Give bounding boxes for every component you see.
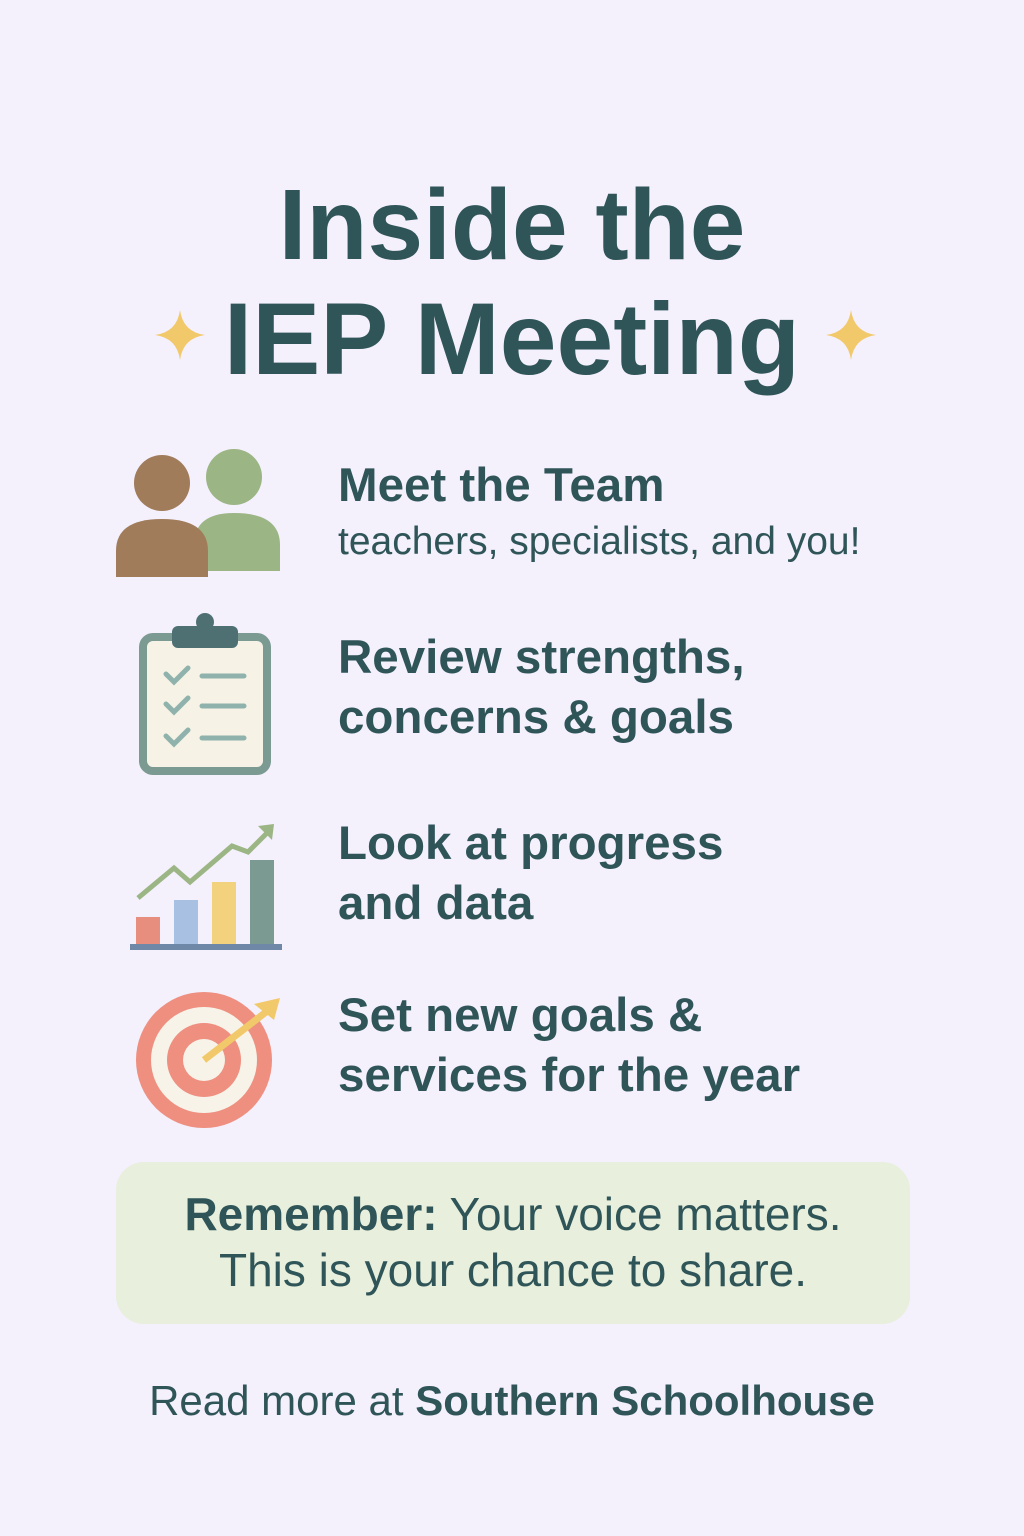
icon: sparkle right	[826, 310, 876, 360]
title: Inside the	[279, 169, 745, 281]
item 2 text: Review strengths,	[338, 631, 745, 684]
title	[224, 169, 800, 396]
callout	[116, 1162, 910, 1324]
title: IEP Meeting	[224, 282, 800, 396]
icon: team	[116, 449, 280, 577]
item 2 text	[338, 631, 745, 744]
item 2 text: concerns & goals	[338, 691, 734, 744]
item 1 text: Meet the Team	[338, 459, 664, 512]
item 4 text	[338, 989, 800, 1102]
footer: Read more at Southern Schoolhouse	[149, 1377, 875, 1424]
item 3 text: Look at progress	[338, 817, 723, 870]
item 3 text	[338, 817, 723, 930]
item 1 text: teachers, specialists, and you!	[338, 520, 860, 563]
icon: chart	[130, 824, 282, 950]
icon: sparkle left	[155, 310, 205, 360]
item 1 text	[338, 459, 860, 563]
callout: Remember: Your voice matters.	[184, 1188, 842, 1240]
icon: target	[136, 992, 280, 1128]
icon: clipboard	[139, 613, 271, 775]
callout: This is your chance to share.	[219, 1244, 807, 1296]
item 3 text: and data	[338, 877, 533, 930]
item 4 text: Set new goals &	[338, 989, 702, 1042]
item 4 text: services for the year	[338, 1049, 800, 1102]
